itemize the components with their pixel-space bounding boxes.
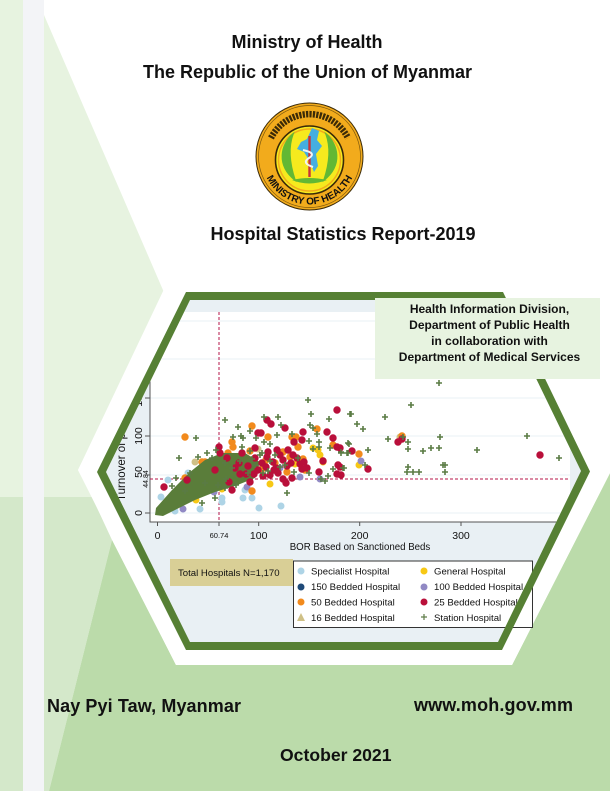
legend: 25 Bedded Hospital (434, 598, 518, 608)
white hexagon frame (78, 285, 610, 665)
points: 100 bedded hospital (183, 452, 361, 509)
y axis labels: 100 (133, 427, 145, 445)
callout: publisher box: Health Information Division, (410, 302, 569, 316)
icon: Ministry of Health seal: MINISTRY OF HEALTH (266, 174, 352, 204)
heading: report title: Hospital Statistics Report-2019 (210, 224, 476, 244)
icon: Ministry of Health seal (256, 102, 364, 210)
legend: Station Hospital (434, 613, 501, 624)
legend: 150 Bedded Hospital (311, 582, 400, 593)
y axis labels: Turnover of patients (116, 399, 128, 501)
text: location: Nay Pyi Taw, Myanmar (47, 696, 241, 716)
hexagon green border (97, 292, 590, 650)
title: ministry name: The Republic of the Union of Myanmar (143, 62, 472, 82)
callout: publisher box: in collaboration with (431, 334, 548, 348)
legend: General Hospital (434, 566, 505, 578)
reference lines (150, 312, 570, 522)
x axis labels (155, 532, 470, 550)
callout: total hospitals (170, 559, 293, 586)
text: date: October 2021 (280, 745, 392, 765)
x axis labels: 300 (452, 530, 470, 542)
legend: 100 Bedded Hospital (434, 582, 523, 593)
callout: publisher box: Department of Medical Services (399, 350, 581, 364)
y axis labels: 0 (133, 510, 145, 516)
x axis labels: 60.74 (210, 531, 228, 540)
points: dense station hospital mass (155, 453, 260, 516)
title: ministry name: Ministry of Health (231, 32, 383, 52)
x axis labels: 100 (250, 530, 268, 542)
points: 25 bedded hospital (164, 410, 540, 490)
callout: total hospitals: Total Hospitals N=1,170 (178, 568, 280, 579)
callout: publisher box: Department of Public Health (409, 318, 570, 332)
text: website: www.moh.gov.mm (413, 695, 573, 715)
y axis labels: 50 (133, 466, 145, 478)
legend (294, 561, 532, 628)
grid lines (150, 321, 570, 513)
legend: 50 Bedded Hospital (311, 598, 395, 608)
plot area (150, 312, 570, 522)
x axis labels: 200 (351, 530, 369, 542)
y axis labels (117, 398, 148, 516)
title: ministry name (143, 32, 472, 82)
points: specialist hospital (161, 473, 281, 511)
callout: publisher box (375, 298, 600, 379)
x axis labels: BOR Based on Sanctioned Beds (290, 542, 430, 553)
legend: 16 Bedded Hospital (311, 613, 395, 624)
points: 16 bedded hospital (195, 437, 400, 470)
y axis labels: 44.84 (143, 470, 150, 488)
panel: scatter chart in hexagon (97, 292, 590, 650)
axes (145, 378, 570, 526)
legend: Specialist Hospital (311, 566, 389, 578)
points: general hospital (196, 448, 359, 500)
points: 50 bedded hospital (185, 426, 402, 491)
x axis labels: 0 (155, 530, 161, 542)
y axis labels: 150 (133, 389, 145, 407)
points: station hospital (169, 380, 562, 506)
